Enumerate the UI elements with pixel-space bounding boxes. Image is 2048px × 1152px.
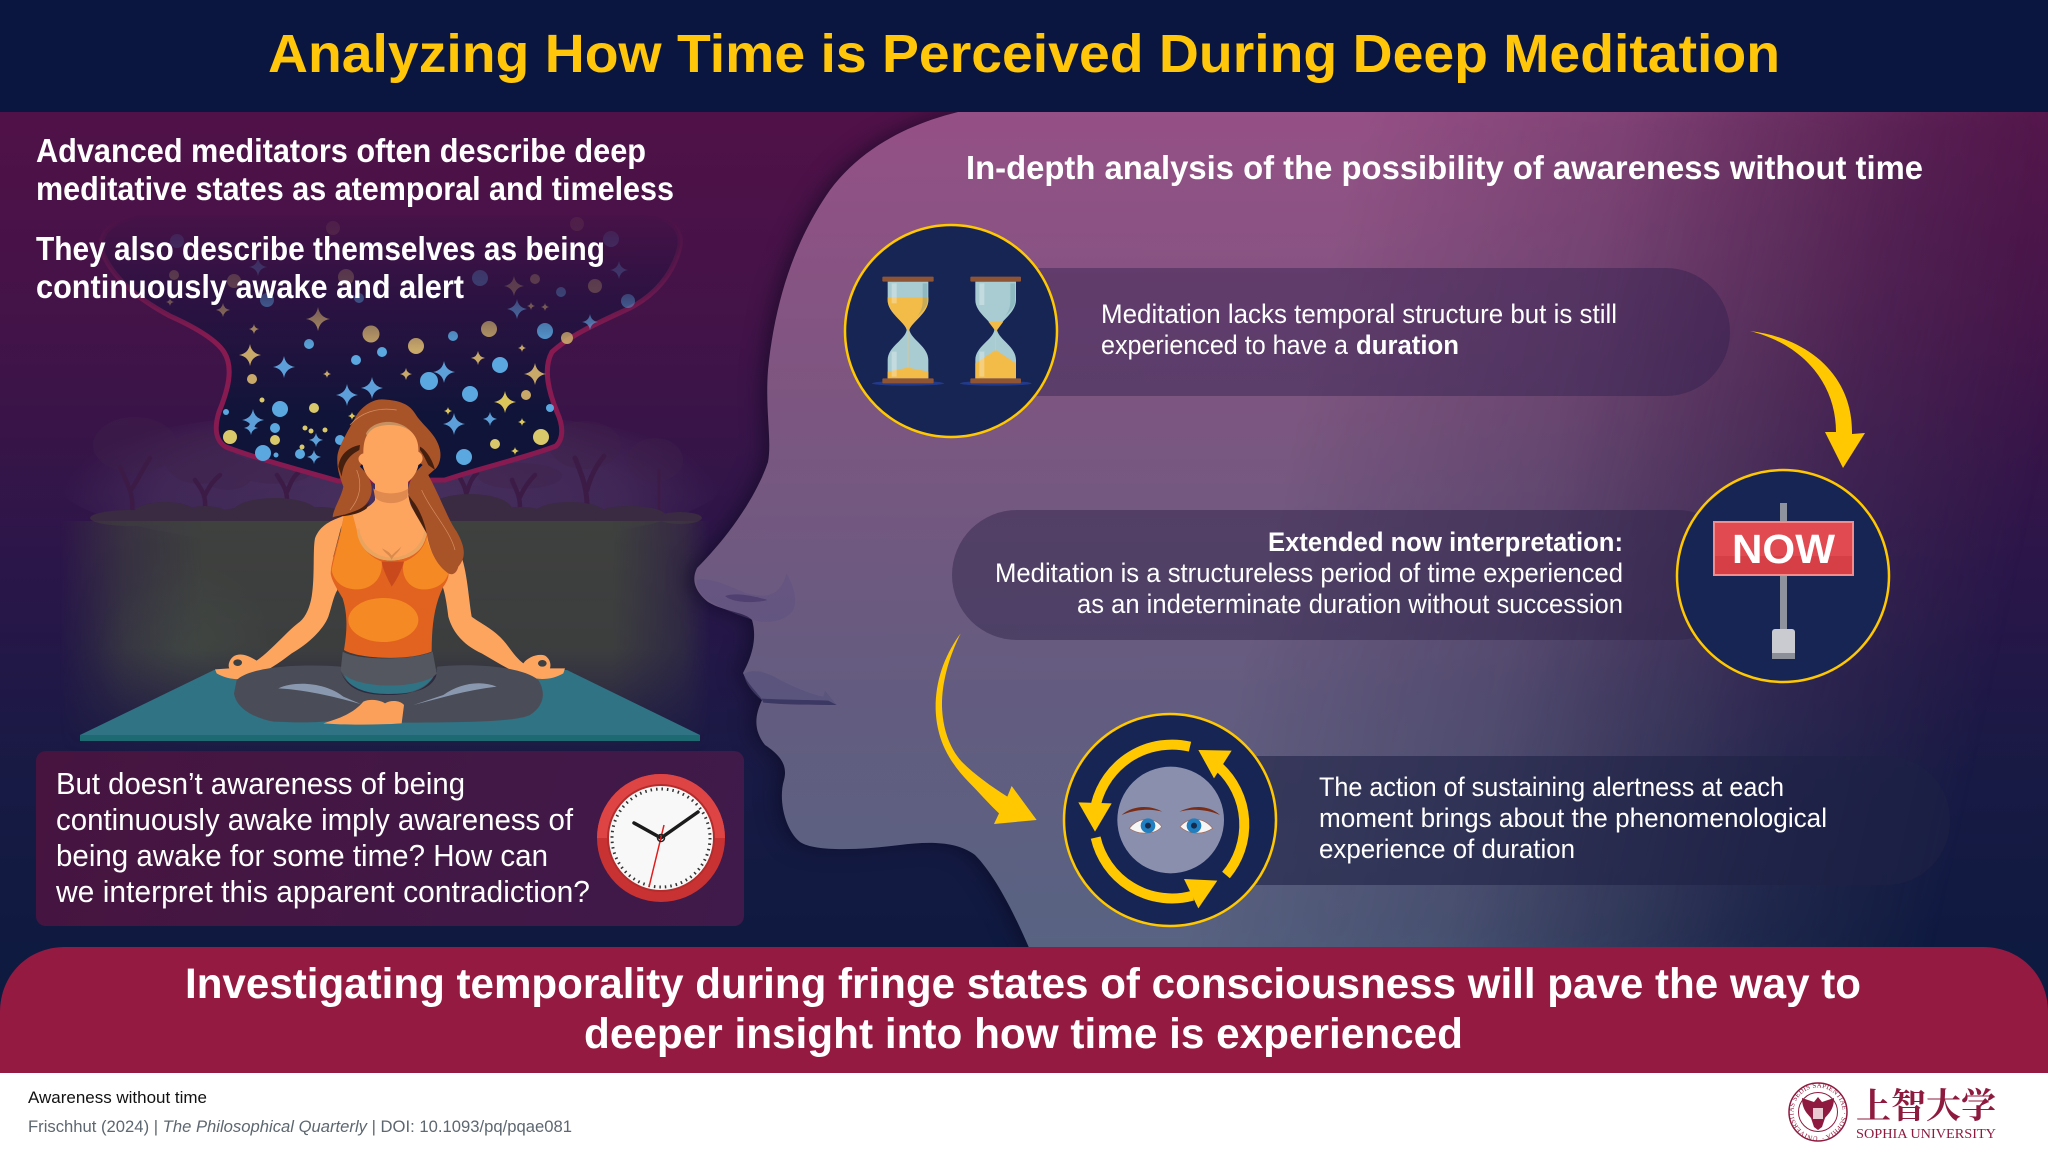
meditating woman [215,399,565,725]
panel: question [36,751,744,926]
hair [333,399,464,574]
citation: Awareness without time [28,1088,207,1107]
panel: extended now: Meditation is a structureless period of time experienced [995,558,1623,588]
citation [28,1088,572,1136]
orange tank top [331,514,449,658]
panel: question: continuously awake imply awareness of [56,802,573,837]
footer [0,1073,2048,1142]
right arm [443,550,565,679]
intro text: Advanced meditators often describe deep [36,132,646,169]
header band [0,0,2048,112]
panel: sustaining alertness: The action of sustaining alertness at each [1319,772,1784,802]
icon: eyes in a cycle of arrows [1064,714,1276,926]
intro text: They also describe themselves as being [36,230,605,267]
bare foot [323,700,404,725]
thought bubble of stars [101,215,680,481]
neck and chest [340,477,448,560]
panel: question: But doesn’t awareness of being [56,766,465,801]
forest silhouette [55,410,725,550]
logo: Sophia University: UNIVERSITAS SEDIS SAPIENTIAE · SOPHIA · [1790,1084,1846,1140]
arrow: now to alertness [936,633,1037,824]
arrow: duration to now [1750,331,1865,468]
conclusion banner [0,947,2048,1073]
icon: NOW sign: NOW [1732,526,1835,572]
icon: wall clock [597,774,725,902]
head silhouette [694,112,2048,950]
icon: NOW sign [1677,470,1889,682]
icon: hourglasses [845,225,1057,437]
panel: question: we interpret this apparent contradiction? [55,874,590,909]
panel: extended now: Extended now interpretation: [1268,527,1623,557]
panel: duration: Meditation lacks temporal structure but is still [1101,299,1617,329]
logo: Sophia University [1788,1082,1996,1142]
faceless head [358,425,423,489]
grass field [80,521,698,716]
panel: duration [845,225,1730,437]
citation: Frischhut (2024) | The Philosophical Quarterly | DOI: 10.1093/pq/pqae081 [28,1117,572,1136]
conclusion banner: Investigating temporality during fringe states of consciousness will pave the way to [185,960,1861,1008]
left hourglass [882,277,934,383]
trousers and crossed legs [234,665,543,723]
logo: Sophia University: 上智大学 [1856,1087,1996,1126]
logo: Sophia University: SOPHIA UNIVERSITY [1856,1127,1996,1142]
panel: sustaining alertness [1064,714,1950,926]
yoga mat [80,670,700,741]
intro text [36,132,674,305]
panel: extended now: as an indeterminate duration without succession [1077,589,1623,619]
right hourglass [970,277,1021,383]
panel: duration: duration [1356,330,1459,360]
conclusion banner: deeper insight into how time is experienced [584,1010,1463,1058]
panel: duration: experienced to have a [1101,330,1349,360]
panel: extended now [952,470,1889,682]
intro text: continuously awake and alert [36,268,464,305]
mudra finger gaps [233,659,547,667]
panel: question: being awake for some time? How can [56,838,548,873]
panel: sustaining alertness: experience of duration [1319,834,1575,864]
panel: sustaining alertness: moment brings about the phenomenological [1319,803,1827,833]
left arm [215,516,344,679]
title: Analyzing How Time is Perceived During Deep Meditation [268,24,1780,84]
intro text: meditative states as atemporal and timeless [36,170,674,207]
illustration: meditation scene [80,217,702,741]
facial details: nose and mouth [697,573,837,705]
section heading: In-depth analysis of the possibility of awareness without time [966,149,1923,186]
